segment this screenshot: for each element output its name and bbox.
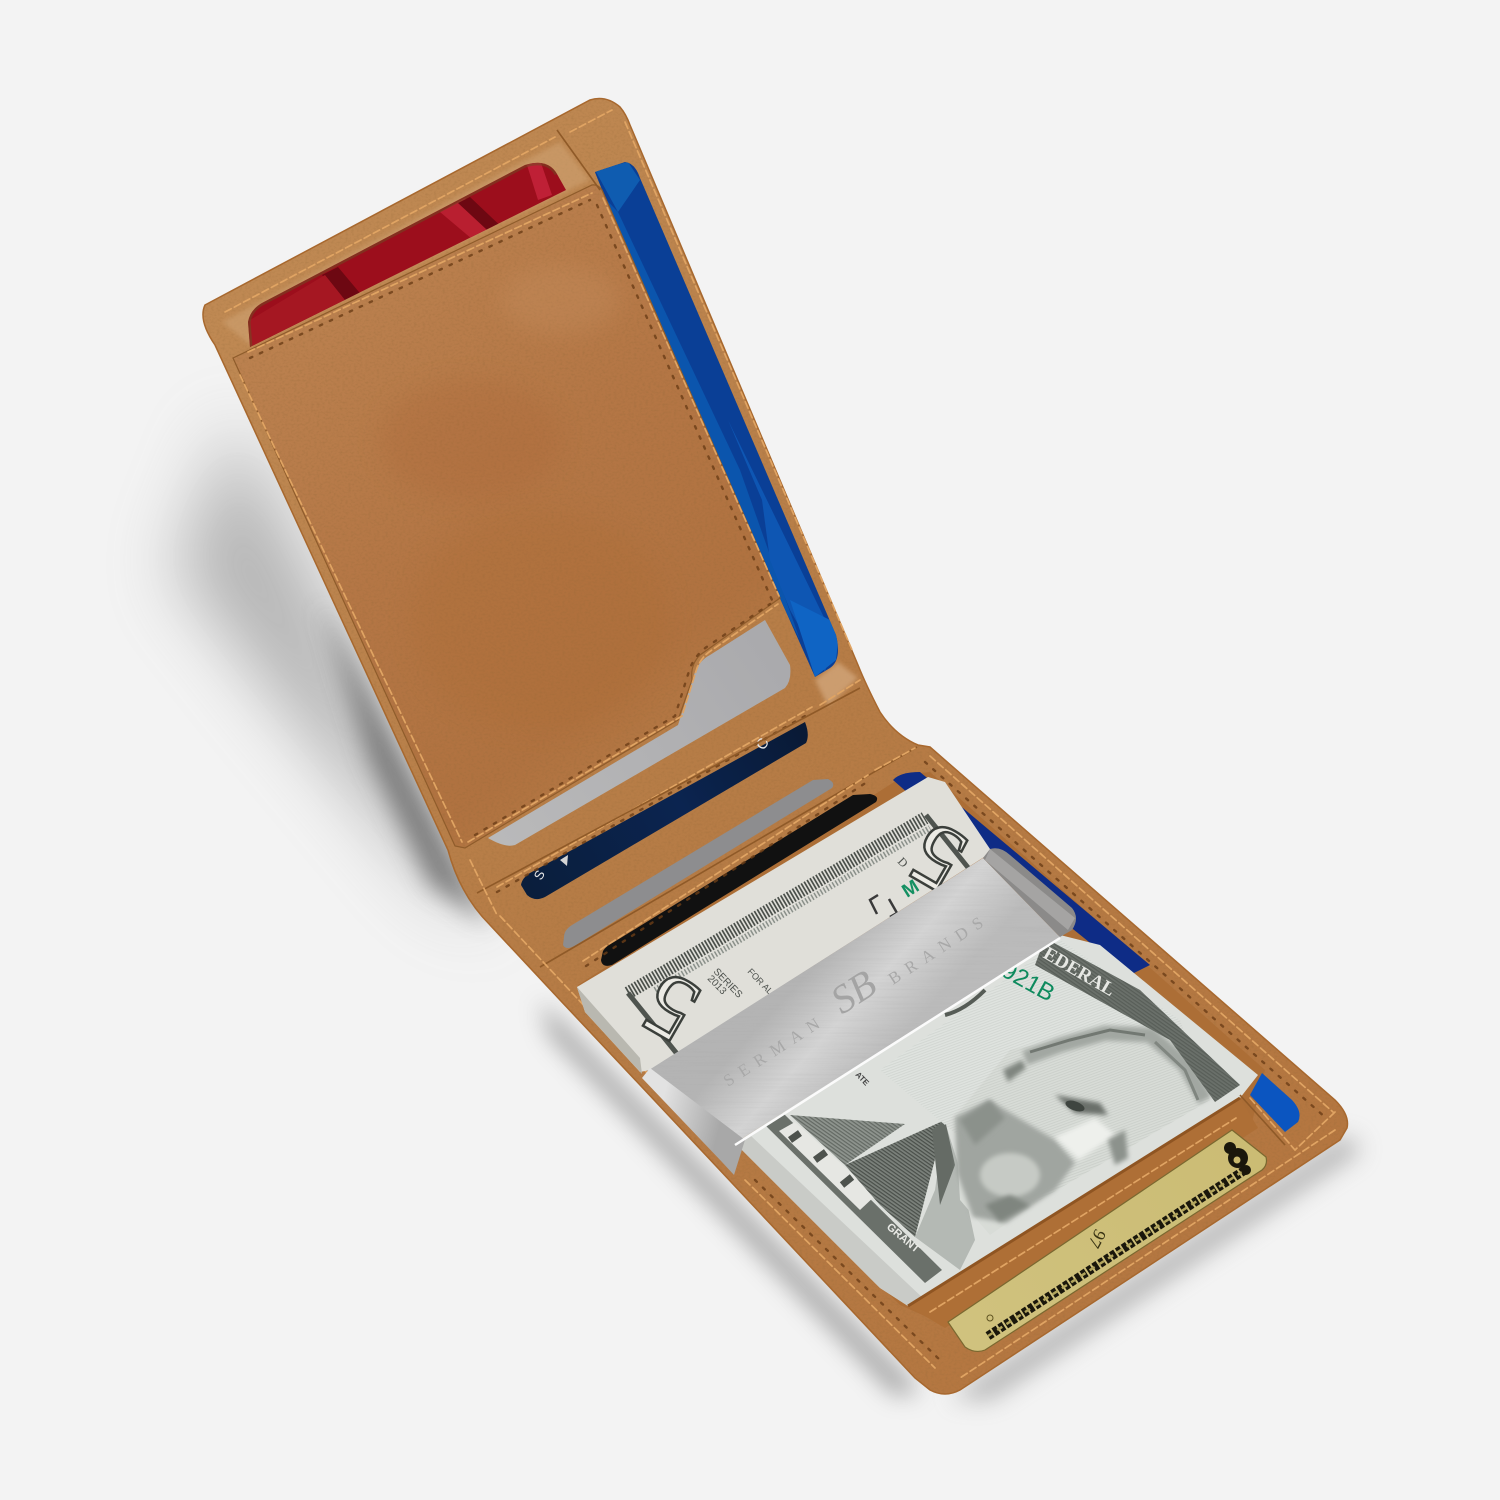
navy card in the second slot [521,722,808,899]
bill left border [765,1113,942,1283]
blue card behind the cash [893,772,1300,1132]
hair [1025,1033,1205,1100]
cash stack, top half: 2013 [705,973,729,997]
wallet leather body [203,99,1347,1394]
navy card in the second slot: S [531,867,548,882]
bill engraved border [628,818,925,993]
leather strap below the cash [908,1095,1295,1328]
clip engraved brand: BRANDS [885,909,993,988]
stitching on the top panel [225,110,860,893]
cash stack, bottom half: GRANT [884,1221,922,1256]
beard [955,1100,1075,1223]
gold card [948,1130,1266,1351]
bill right border with FEDERAL [1035,938,1240,1102]
blue card behind the front pocket [590,160,850,690]
front pocket [233,185,780,848]
pale leather rim [222,142,590,345]
clip lower edge highlight [735,938,1060,1145]
Grant portrait [958,1165,968,1210]
lower pocket interior [578,772,1265,1325]
money clip [642,848,1076,1175]
black card in the fourth slot [601,794,877,966]
clip engraved brand [720,909,993,1090]
cash stack, bottom half: ATE [854,1070,871,1088]
cash stack, bottom half [730,935,1258,1308]
grey card in the third slot [563,779,833,948]
cash stack, top half: M [899,876,923,902]
stitching on the lower panel [470,747,1335,1378]
red card in the top slot [248,162,566,347]
cash stack, top half: FOR AL [746,966,775,996]
cash stack, bottom half: 921B [997,957,1059,1007]
clip folded end, left [642,1068,745,1175]
gold card: 97 [1084,1226,1110,1251]
clip engraved brand: SERMAN [720,1010,830,1090]
grey metal card under the pocket notch [488,620,790,846]
cash stack, top half: 5 [625,952,716,1064]
navy card in the second slot: C [753,735,773,753]
clip band [649,858,1060,1143]
pale patch beneath blue card [815,662,858,706]
cash stack, top half [577,777,992,1074]
cash stack, bottom half: EDERAL [1040,943,1119,1001]
cash stack, top half: 5 [892,802,983,914]
folded bill edge [730,1135,925,1308]
eyes and nose [1055,1095,1108,1115]
coat and lapel [790,1115,905,1165]
wallet drop shadow [175,420,1362,1400]
cash stack, top half: D [895,854,911,871]
clip tab, top right [983,848,1076,937]
clip engraved brand: SB [822,961,884,1023]
cash stack, top half: SERIES [711,966,744,1001]
